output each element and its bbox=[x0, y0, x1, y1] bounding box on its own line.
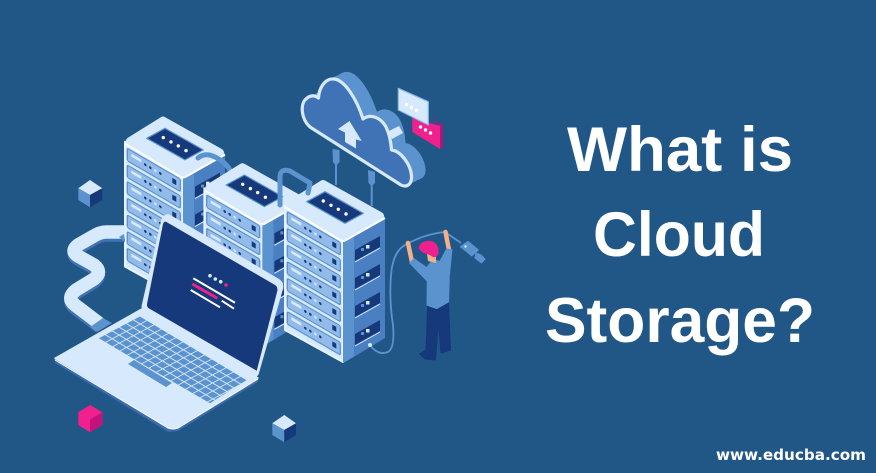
screen loading dots bbox=[208, 274, 228, 287]
cable: from server to person's hands bbox=[370, 232, 461, 353]
icon: blue cube lower right bbox=[272, 415, 296, 442]
title: Cloud bbox=[593, 200, 765, 270]
title: What is bbox=[567, 115, 793, 185]
arms bbox=[408, 232, 449, 262]
cable: laptop to server bbox=[71, 232, 125, 332]
cloud with upload arrow bbox=[302, 72, 426, 186]
laptop screen frame bbox=[142, 214, 284, 377]
hair bbox=[418, 241, 439, 257]
legs bbox=[420, 299, 450, 360]
server rack: left bbox=[125, 121, 225, 299]
icon: pink chat bubble bbox=[412, 118, 443, 149]
icon: pink cube bbox=[78, 405, 102, 432]
neck bbox=[427, 254, 436, 263]
cable: handle between middle and right servers bbox=[280, 170, 310, 205]
server rack: right bbox=[285, 184, 385, 362]
torso bbox=[410, 249, 452, 308]
icon: white chat bubble bbox=[398, 88, 428, 125]
server rack: middle bbox=[204, 167, 304, 346]
title: Storage? bbox=[545, 286, 815, 356]
icon: small blue cube upper left bbox=[78, 180, 102, 207]
icon: cable plug bbox=[461, 242, 485, 263]
website watermark: www.educba.com bbox=[716, 446, 866, 464]
cloud connectors bbox=[332, 149, 375, 206]
keyboard bbox=[98, 316, 247, 403]
cable: handle between left and middle servers bbox=[198, 155, 232, 177]
spacebar bbox=[128, 360, 172, 387]
icon: upload arrow bbox=[338, 121, 362, 148]
title bbox=[545, 115, 815, 356]
screen text lines bbox=[191, 278, 235, 309]
icon: port on server bbox=[368, 343, 372, 347]
person holding cable bbox=[408, 232, 452, 360]
laptop base shadow bbox=[55, 358, 258, 432]
laptop screen bbox=[147, 222, 277, 371]
laptop bbox=[55, 214, 284, 432]
laptop base bbox=[55, 309, 258, 428]
